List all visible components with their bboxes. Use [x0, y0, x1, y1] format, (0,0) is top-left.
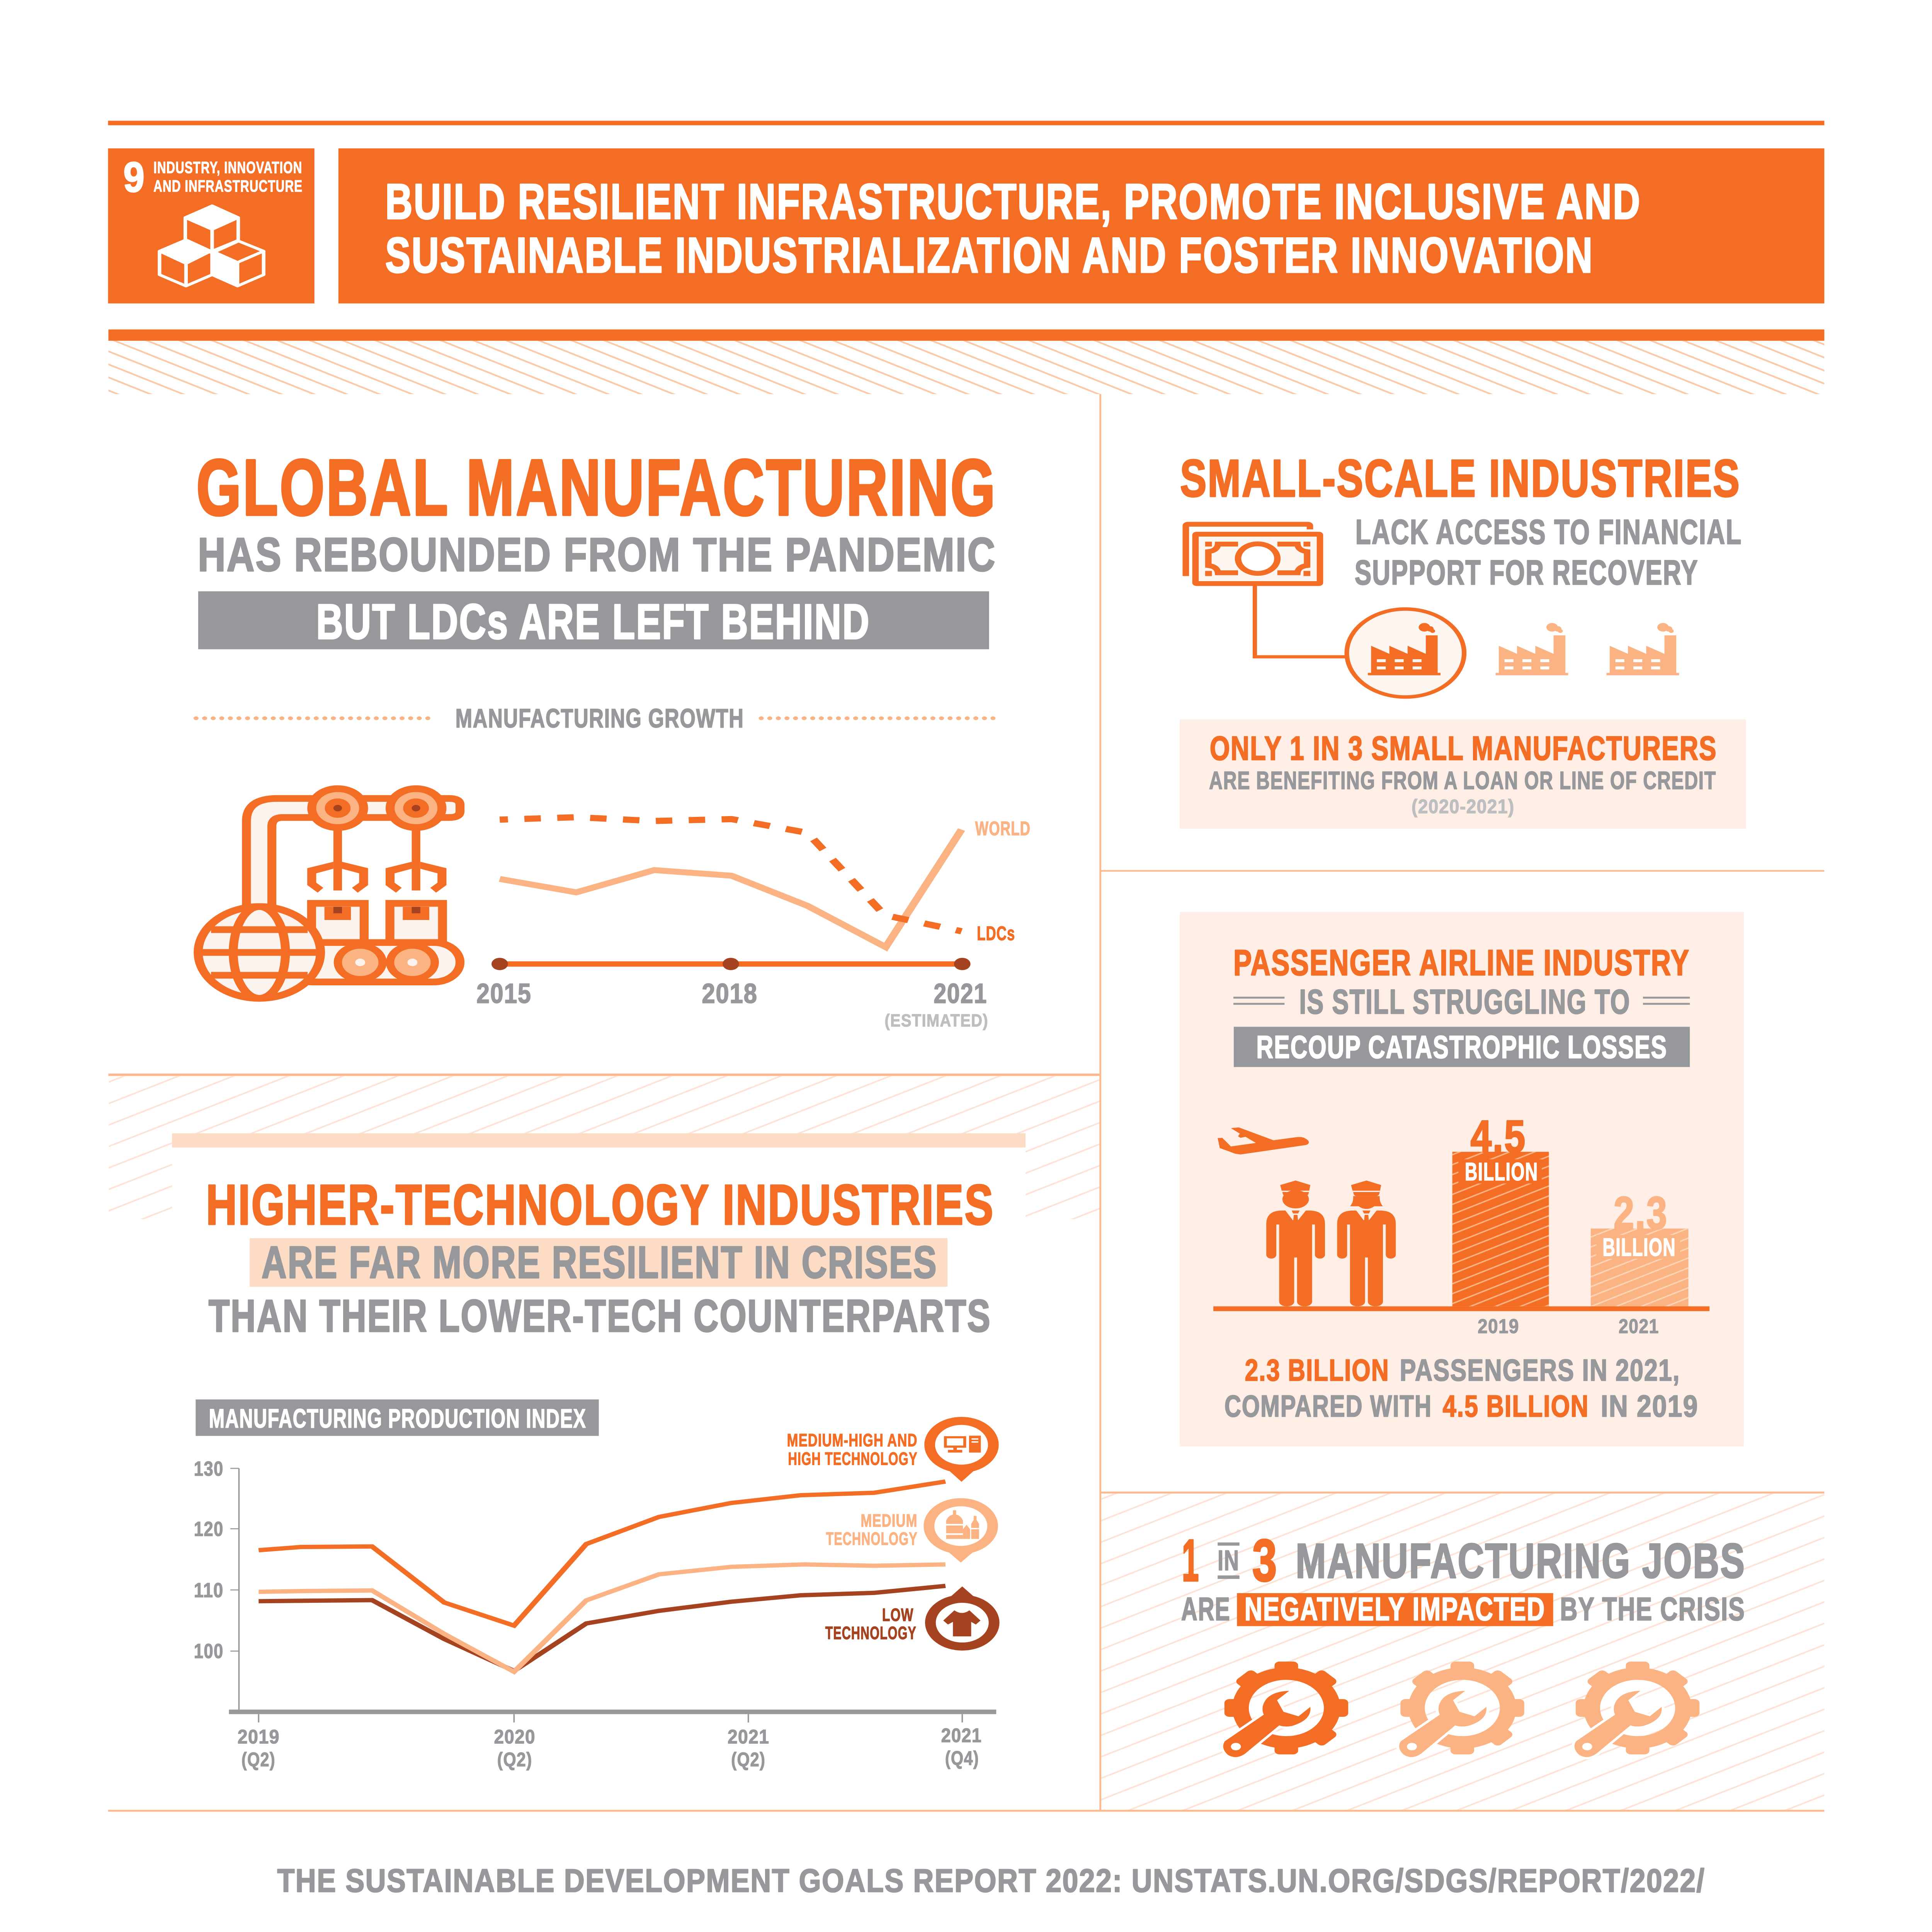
chart: manufacturing production index — [194, 1458, 996, 1770]
axis — [492, 958, 971, 970]
joints — [307, 785, 446, 831]
bar: 2021: 2.3 — [1614, 1187, 1668, 1238]
icon: factory in circle — [1347, 609, 1464, 697]
heading: higher-technology industries: ARE FAR MORE RESILIENT IN CRISES — [262, 1237, 937, 1288]
line: medium technology — [259, 1565, 946, 1672]
axis labels: (ESTIMATED) — [884, 1011, 988, 1031]
y axis labels: 100 — [194, 1640, 224, 1663]
header band with hatching — [109, 330, 1824, 394]
claws — [307, 829, 446, 893]
chart baseline — [1213, 1306, 1709, 1311]
bar: 2019 — [1452, 1111, 1549, 1338]
bar: 2021: BILLION — [1602, 1233, 1676, 1262]
icon: gear and wrench 2 — [1399, 1662, 1524, 1757]
series labels: LDCs — [977, 922, 1015, 944]
heading: 1 in 3 manufacturing jobs — [1182, 1527, 1746, 1594]
icon: airplane — [1218, 1128, 1309, 1155]
heading: 1 in 3 manufacturing jobs: 1 — [1182, 1527, 1200, 1594]
series labels — [975, 817, 1031, 944]
heading: IS STILL STRUGGLING TO — [1299, 983, 1631, 1021]
callout: high technology — [787, 1421, 993, 1482]
top rule — [108, 121, 1824, 125]
bar: 2021 — [1591, 1187, 1689, 1338]
panel: passenger airline industry — [1180, 912, 1744, 1446]
icon: factory 2 — [1496, 623, 1568, 675]
bar: 2019: 4.5 — [1471, 1111, 1526, 1162]
text: passengers comparison: 4.5 BILLION — [1443, 1389, 1589, 1423]
x axis labels: 2021 — [728, 1726, 769, 1748]
axis labels: 2018 — [702, 978, 758, 1009]
icon: gear and wrench 1 — [1223, 1662, 1348, 1757]
line: high technology — [259, 1481, 946, 1626]
y axis labels: 130 — [194, 1458, 224, 1480]
chart title: manufacturing production index — [196, 1400, 599, 1436]
x axis labels: (Q2) — [731, 1748, 765, 1770]
title banner — [338, 148, 1824, 303]
icon: factory 3 — [1607, 623, 1679, 675]
heading: global manufacturing: BUT LDCs ARE LEFT BEHIND — [316, 594, 870, 649]
heading: higher-technology industries: THAN THEIR LOWER-TECH COUNTERPARTS — [209, 1291, 991, 1342]
heading: global manufacturing: HAS REBOUNDED FROM THE PANDEMIC — [198, 528, 996, 581]
heading: higher-technology industries — [206, 1173, 995, 1342]
text: negatively impacted: ARE — [1181, 1591, 1231, 1627]
chart title: manufacturing growth: MANUFACTURING GROWTH — [455, 704, 744, 733]
axis labels: 2021 — [934, 978, 987, 1009]
x axis labels: 2019 — [238, 1726, 280, 1748]
x axis labels: (Q4) — [945, 1747, 979, 1769]
heading: global manufacturing: GLOBAL MANUFACTURING — [196, 443, 997, 532]
y axis labels — [194, 1458, 224, 1663]
x axis labels: 2021 — [941, 1725, 982, 1746]
connector line — [1255, 586, 1347, 657]
text: passengers comparison: 2.3 BILLION — [1245, 1353, 1389, 1387]
text: lack access — [1355, 513, 1742, 592]
bar: 2019: BILLION — [1465, 1158, 1538, 1186]
callout: medium technology: MEDIUM — [861, 1510, 918, 1531]
globe — [198, 906, 320, 998]
bar: 2019: 2019 — [1478, 1315, 1519, 1338]
text: passengers comparison: COMPARED WITH — [1225, 1389, 1432, 1423]
axes — [229, 1468, 996, 1723]
heading: 1 in 3 manufacturing jobs: IN — [1218, 1545, 1240, 1576]
icon: pin with t-shirt — [930, 1587, 994, 1646]
line: low technology — [259, 1586, 946, 1671]
line: world — [500, 830, 961, 947]
icon: robot arm and globe — [198, 785, 460, 998]
boxes — [311, 903, 442, 942]
callout: low technology: TECHNOLOGY — [825, 1622, 917, 1643]
bar: 2021: 2021 — [1619, 1315, 1659, 1338]
conveyor — [286, 942, 460, 982]
text: passengers comparison: PASSENGERS IN 2021, — [1400, 1353, 1680, 1387]
panel: small manufacturers callout: (2020-2021) — [1412, 796, 1515, 818]
axis labels: 2015 — [476, 978, 532, 1009]
heading: global manufacturing — [196, 443, 997, 649]
axis labels — [476, 978, 988, 1031]
callout: medium technology — [826, 1502, 993, 1563]
icon: cubes — [160, 206, 264, 286]
goal number: 9 — [123, 153, 146, 201]
chart title: manufacturing production index: MANUFACTURING PRODUCTION INDEX — [209, 1404, 586, 1434]
panel: small manufacturers callout — [1180, 719, 1746, 829]
panel: lower left hatching — [109, 1076, 1100, 1225]
y axis labels: 110 — [194, 1579, 224, 1602]
icon: pin with bottles — [929, 1502, 993, 1563]
text: negatively impacted: NEGATIVELY IMPACTED — [1245, 1591, 1545, 1627]
series labels: WORLD — [975, 817, 1031, 840]
arm pipe — [247, 798, 460, 907]
text: passengers comparison: IN 2019 — [1601, 1389, 1698, 1423]
y axis labels: 120 — [194, 1518, 224, 1541]
text: negatively impacted: BY THE CRISIS — [1560, 1591, 1745, 1627]
SDG 9 badge — [108, 148, 315, 303]
goal name: INDUSTRY, INNOVATION — [153, 158, 302, 177]
panel: lower right hatching — [1101, 1493, 1824, 1810]
line: LDCs — [500, 817, 961, 931]
x axis labels: (Q2) — [497, 1748, 532, 1770]
chart: manufacturing growth lines — [476, 817, 1031, 1031]
icon: pilot 2 — [1337, 1180, 1396, 1306]
callout: high technology: MEDIUM-HIGH AND — [787, 1430, 918, 1450]
callout: low technology — [825, 1587, 994, 1646]
callout: medium technology: TECHNOLOGY — [826, 1529, 918, 1549]
icon: banknotes — [1186, 524, 1320, 583]
x axis labels — [238, 1725, 982, 1770]
icon: gear and wrench 3 — [1575, 1662, 1699, 1757]
x axis labels: (Q2) — [242, 1748, 276, 1770]
goal name — [153, 158, 303, 195]
panel dividers — [108, 394, 1824, 1811]
heading: higher-technology industries: HIGHER-TECHNOLOGY INDUSTRIES — [206, 1173, 995, 1236]
callout: low technology: LOW — [882, 1605, 913, 1625]
goal name: AND INFRASTRUCTURE — [153, 177, 303, 195]
icon: pin with computer — [930, 1421, 993, 1482]
heading: 1 in 3 manufacturing jobs: 3 — [1252, 1527, 1278, 1594]
icon: pilot — [1266, 1180, 1325, 1306]
heading — [1233, 942, 1690, 1067]
x axis labels: 2020 — [494, 1726, 536, 1748]
callout: high technology: HIGH TECHNOLOGY — [788, 1449, 918, 1469]
text: passengers comparison — [1225, 1353, 1698, 1423]
